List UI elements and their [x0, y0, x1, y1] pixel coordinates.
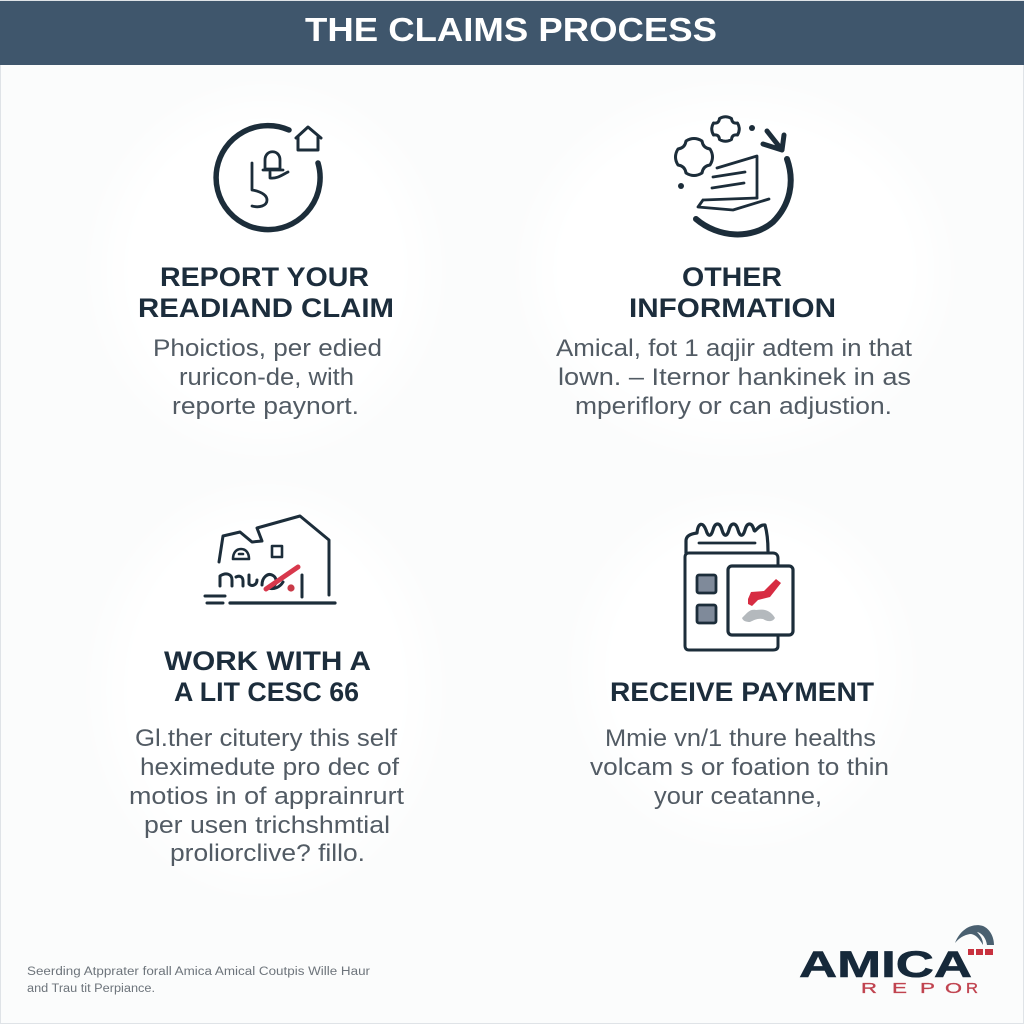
heading [164, 646, 371, 707]
logo: Amica Repor: R [861, 980, 877, 997]
body text: per usen trichshmtial [144, 812, 390, 839]
body text: lown. – Iternor hankinek in as [558, 364, 911, 391]
panel: receive payment [590, 524, 889, 810]
heading: RECEIVE PAYMENT [610, 677, 875, 707]
heading: WORK WITH A [164, 646, 371, 676]
body text: proliorclive? fillo. [170, 840, 365, 867]
body text [556, 335, 912, 420]
body text: Gl.ther citutery this self [135, 725, 397, 752]
body text: Mmie vn/1 thure healths [605, 725, 876, 752]
footer note [27, 966, 370, 995]
icon: damaged house [205, 516, 335, 603]
logo: Amica Repor: R [966, 980, 978, 997]
body text: volcam s or foation to thin [590, 754, 889, 781]
body text: your ceatanne, [654, 783, 822, 810]
icon: clock circle with house and bell [216, 126, 321, 230]
footer note: Seerding Atpprater forall Amica Amical Coutpis Wille Haur [27, 966, 370, 978]
body text: Phoictios, per edied [153, 335, 382, 362]
heading: READIAND CLAIM [138, 293, 394, 323]
heading: REPORT YOUR [160, 262, 369, 292]
body text: mperiflory or can adjustion. [575, 393, 892, 420]
logo: Amica Repor: O [945, 980, 962, 997]
heading [138, 262, 394, 323]
heading: INFORMATION [629, 293, 836, 323]
heading [629, 262, 836, 323]
heading: OTHER [682, 262, 782, 292]
icon: notepad with payment card [685, 524, 793, 650]
footer note: and Trau tit Perpiance. [27, 983, 155, 995]
body text: reporte paynort. [172, 393, 359, 420]
body text: Amical, fot 1 aqjir adtem in that [556, 335, 912, 362]
body text: motios in of apprainrurt [129, 783, 404, 810]
body text [153, 335, 382, 420]
logo: Amica Repor: AMICA [799, 944, 972, 985]
panel: report your claim [138, 126, 394, 420]
panel: other information [556, 117, 912, 420]
logo: Amica Repor: P [920, 980, 935, 997]
body text [590, 725, 889, 810]
panel: work with an adjuster [129, 516, 404, 867]
body text [129, 725, 404, 867]
body text: heximedute pro dec of [140, 754, 399, 781]
body text: ruricon-de, with [179, 364, 354, 391]
logo: Amica Repor: E [892, 980, 907, 997]
header banner [0, 1, 1024, 65]
logo: Amica Repor [799, 925, 994, 997]
heading: A LIT CESC 66 [174, 677, 359, 707]
title: THE CLAIMS PROCESS [305, 12, 717, 49]
icon: laptop with arrow and clouds [676, 117, 791, 234]
